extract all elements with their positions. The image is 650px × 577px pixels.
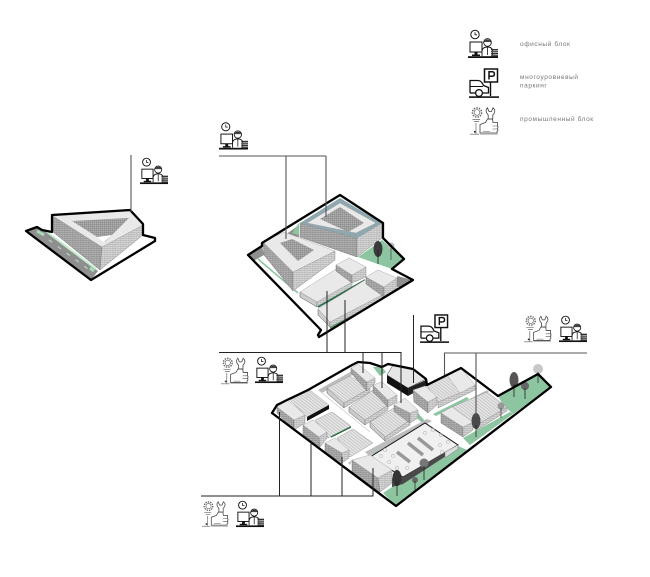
tree light — [388, 242, 394, 260]
label: multilevel parking: паркинг — [520, 82, 547, 90]
right ribbed R2 — [452, 392, 507, 430]
green lawn — [358, 240, 404, 269]
block L2 — [303, 420, 327, 447]
icon: parking — [420, 315, 449, 343]
leader lines upper right — [444, 353, 587, 417]
site ground — [272, 362, 551, 506]
building — [53, 211, 143, 270]
green parking pads — [37, 231, 94, 271]
icon: office — [140, 158, 168, 184]
leader line — [130, 155, 132, 212]
trees — [392, 364, 543, 496]
back building — [300, 198, 382, 257]
green strip — [47, 232, 96, 269]
block L1 tall — [277, 400, 305, 430]
leader lines upper left — [219, 291, 401, 403]
site outline — [272, 362, 551, 506]
icons: bottom left — [202, 501, 264, 527]
block L5 ribbed — [337, 429, 373, 457]
block L1 ribbed with dark band — [290, 390, 329, 421]
grey ground corners — [248, 246, 264, 261]
legend — [468, 30, 594, 135]
green strip between blocks — [318, 280, 365, 307]
site outline — [248, 195, 413, 337]
front building — [263, 232, 335, 291]
lower site: industrial and parking — [201, 291, 587, 527]
green areas — [372, 367, 551, 506]
icon: industrial block — [470, 108, 498, 135]
low block E — [318, 280, 382, 327]
middle site: office and industrial — [219, 123, 413, 337]
grey road strip — [26, 227, 98, 280]
icons: upper left — [221, 357, 283, 384]
label: multilevel parking: многоуровневый — [520, 74, 579, 81]
tall block bottom — [352, 455, 392, 492]
label: industrial block: промышленный блок — [520, 115, 594, 123]
roof skylights — [379, 428, 450, 470]
roof stripes — [397, 438, 433, 462]
block C1 — [327, 364, 375, 408]
block C2 — [349, 382, 397, 425]
right block R2 tall — [441, 407, 473, 437]
internal roads — [318, 371, 489, 465]
parking building — [387, 365, 428, 396]
site outline — [26, 210, 155, 280]
block C3 — [370, 398, 418, 441]
icon: office — [219, 123, 248, 150]
block L4 — [325, 438, 349, 463]
low block C — [336, 258, 366, 283]
leader lines bottom — [201, 412, 373, 496]
block L3 ribbed — [315, 412, 351, 438]
low block F — [366, 270, 397, 297]
icon: multilevel parking — [469, 69, 499, 98]
right rear ribbed blocks — [427, 368, 475, 408]
left site: office building — [26, 155, 168, 280]
low block D — [300, 269, 352, 307]
site ground — [26, 210, 155, 280]
label: office block: офисный блок — [520, 40, 570, 48]
icon: office block — [468, 30, 498, 58]
tree dark — [374, 241, 382, 264]
leader lines top — [219, 156, 326, 239]
right block R1 — [413, 386, 437, 413]
leader line parking — [412, 315, 414, 383]
icons: upper right — [524, 316, 587, 342]
big bottom block — [370, 423, 458, 487]
green edges — [292, 223, 299, 235]
site ground — [248, 195, 413, 337]
